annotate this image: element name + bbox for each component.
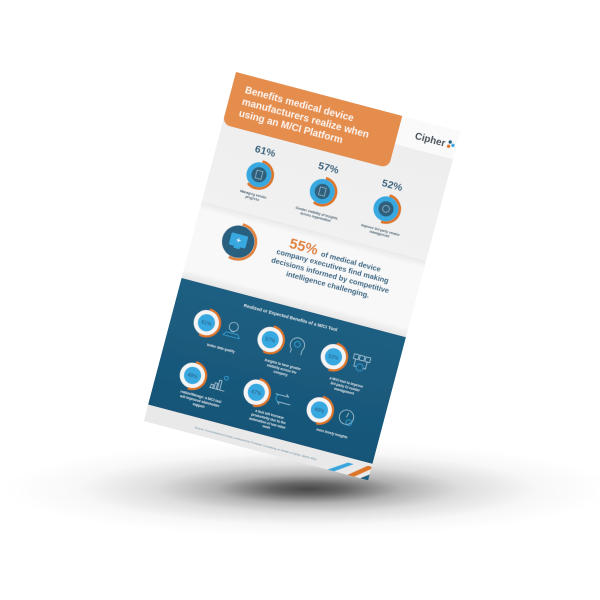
benefit: 47% productivity: work	[261, 424, 271, 430]
upper grey panel	[202, 100, 453, 261]
infographic sheet	[143, 72, 463, 486]
stat: 61%: Managing vendor	[240, 189, 268, 200]
benefit: 61% better data quality: 61%	[200, 319, 212, 328]
benefit: 45% timely insights: more timely insights	[316, 427, 348, 440]
logo strip	[400, 122, 454, 148]
benefit: 47% productivity: 47%	[250, 389, 262, 398]
callout text: 55%: 55% of medical device	[287, 236, 383, 276]
benefit: 47% productivity: a tool will increase	[255, 409, 284, 420]
ring and icon	[369, 192, 403, 226]
benefit: 52% third party: a M/CI tool to improve	[329, 376, 364, 389]
benefit: 52% third party: 3rd party CI vendor	[330, 381, 361, 393]
footer strip	[144, 405, 372, 480]
title: using an M/CI Platform	[238, 108, 344, 146]
benefit: 57% insights: visibility across the	[266, 363, 297, 375]
ground shadow	[3, 441, 600, 537]
callout text: 55%: company executives find making	[275, 247, 390, 285]
benefit: 48% stakeholder support: will improved stakeholder	[179, 394, 221, 408]
benefit: 61% better data quality: better data quality	[207, 343, 235, 354]
stat: 52%: Improve 3rd party vendor	[361, 223, 401, 237]
benefit: 47% productivity: productivity due to the	[251, 412, 286, 425]
benefit: 48% stakeholder support	[172, 359, 230, 413]
stat: 61%	[239, 142, 280, 204]
benefit: 52% third party	[312, 340, 372, 397]
benefit: 45% timely insights	[301, 393, 357, 440]
title: Benefits medical device	[244, 85, 355, 125]
benefit: 57% insights: company	[273, 369, 288, 377]
white callout band	[182, 202, 426, 337]
blue benefits panel	[148, 278, 406, 464]
stat: 61%: 61%	[253, 143, 277, 160]
icon: gauge	[338, 408, 355, 426]
ring and icon	[242, 158, 276, 192]
benefit: 52% third party: 52%	[327, 353, 339, 362]
benefit: 57% insights	[249, 323, 310, 380]
sheet background	[144, 72, 460, 480]
benefit: 47% productivity: automation of low value	[249, 416, 286, 430]
stat: 57%: Greater visibility of insights	[295, 206, 338, 221]
callout text: 55%: decisions informed by competitive	[270, 255, 390, 295]
stat: 57%: across organization	[300, 211, 331, 223]
callout text: 55%: intelligence challenging.	[285, 269, 370, 300]
stat: 57%: 57%	[317, 160, 341, 177]
icon: arrows	[273, 391, 293, 407]
source note: Source: A commissioned study conducted by Forrester Consulting on behalf of Cipher, March 2021	[194, 425, 318, 462]
icon: light bulb	[223, 320, 243, 339]
benefits heading: Realized or Expected Benefits of a M/CI Tool	[243, 303, 338, 332]
stat: 52%	[360, 175, 414, 241]
benefit: 61% better data quality	[187, 306, 245, 354]
ring and icon	[305, 175, 339, 208]
title	[238, 85, 373, 152]
stat: 52%: management	[369, 230, 391, 239]
logo: Cipher: Cipher	[414, 131, 447, 150]
benefit: 57% insights: 57%	[264, 336, 276, 345]
stat: 61%: progress	[245, 195, 260, 202]
stat: 52%: 52%	[380, 177, 404, 194]
stat: 57%	[294, 157, 351, 225]
callout icon: monitor	[216, 220, 260, 263]
logo: Cipher	[414, 131, 456, 152]
title: manufacturers realize when	[241, 97, 370, 141]
benefit: 48% stakeholder support: support	[192, 402, 206, 409]
benefit: 48% stakeholder support: realize/Manage: a M/CI tool	[180, 389, 222, 404]
benefit: 52% third party: management	[334, 386, 355, 396]
benefit: 57% insights: Insights to have greater	[264, 358, 302, 372]
icon: head	[288, 336, 306, 355]
benefit: 48% stakeholder support: 48%	[187, 372, 198, 381]
benefit: 45% timely insights: 45%	[313, 407, 325, 415]
benefit: 47% productivity	[235, 376, 296, 434]
callout text: 55%	[268, 233, 396, 304]
corner stripes	[328, 462, 372, 480]
icon: growth chart	[209, 373, 229, 391]
orange title block	[222, 72, 402, 168]
icon: network	[351, 354, 371, 373]
